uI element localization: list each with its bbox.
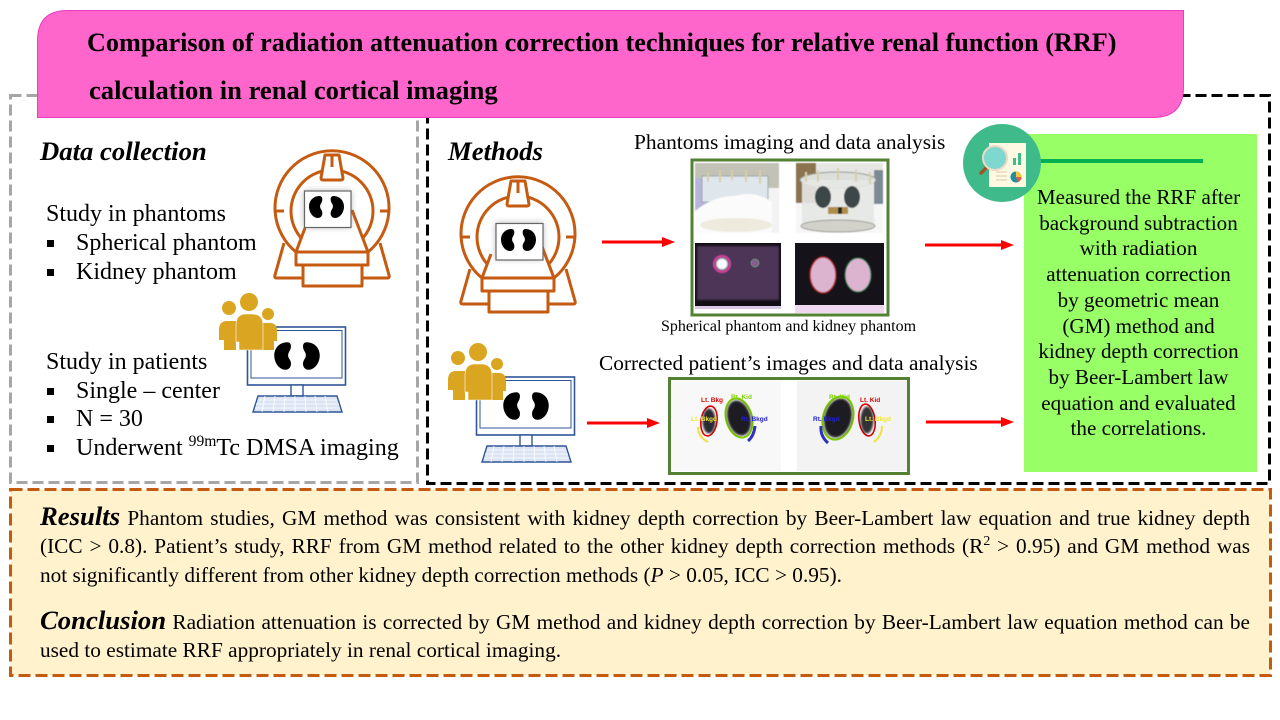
image: right patient scan: [813, 393, 891, 443]
panel: results and conclusion: [10, 490, 1270, 676]
text: conclusion: used to estimate RRF appropriately in renal cortical imaging.: [40, 638, 561, 662]
panel: data collection: [10, 96, 418, 482]
image: right patient scan: Lt. Kid: [860, 397, 880, 404]
text: outcome measure: by geometric mean: [1058, 288, 1219, 312]
image: left patient scan: Lt. Bkg: [701, 397, 723, 404]
figure: patient images: [670, 378, 908, 474]
text: outcome measure: Measured the RRF after: [1037, 185, 1240, 209]
image: left patient scan: [691, 394, 768, 442]
text: outcome measure: attenuation correction: [1046, 262, 1231, 286]
heading: methods: Methods: [448, 136, 543, 166]
list: patients: Single – center: [76, 378, 220, 404]
title text: Comparison of radiation attenuation correction techniques for relative renal function (RRF): [87, 28, 1116, 57]
text: results: (ICC > 0.8). Patient’s study, RRF from GM method related to the other kidney depth correction methods (R2 > 0.95) and GM method was: [40, 533, 1250, 558]
caption: phantom imaging: Phantoms imaging and data analysis: [634, 130, 945, 154]
text: results: Results Phantom studies, GM method was consistent with kidney depth correction by Beer-Lambert law equation and true kidney depth: [40, 501, 1250, 531]
caption: patient images: Corrected patient’s images and data analysis: [599, 351, 978, 375]
icon: patients and computer (methods): [448, 343, 574, 462]
text: results: [40, 501, 1250, 587]
image: left patient scan: Rt. Bkgd: [741, 416, 768, 423]
icon: scanner with kidneys (data collection): [275, 151, 389, 286]
arrow: phantom images to result: [925, 240, 1014, 250]
caption: phantom types: Spherical phantom and kidney phantom: [661, 318, 916, 335]
heading: data collection: Data collection: [40, 136, 207, 166]
list: phantoms: Spherical phantom: [76, 230, 257, 256]
text: outcome measure: background subtraction: [1039, 211, 1238, 235]
text: study in patients: Study in patients: [46, 349, 207, 375]
title banner: [38, 10, 1184, 118]
text: conclusion: [40, 605, 1250, 662]
text: outcome measure: (GM) method and: [1062, 314, 1215, 338]
text: results: not significantly different from other kidney depth correction methods (P > 0.05, ICC > 0.95).: [40, 563, 842, 587]
arrow: corrected images to result: [926, 417, 1014, 427]
image: right patient scan: Rt. Bkgd: [813, 416, 840, 423]
panel: methods: [428, 96, 1270, 484]
panel: outcome measure: [1024, 134, 1257, 472]
list: patients: Underwent 99mTc DMSA imaging: [76, 433, 399, 461]
image: kidney phantom scan: [795, 243, 884, 313]
icon: patients and computer (data collection): [219, 293, 346, 412]
image: spherical phantom scan: [695, 243, 781, 309]
icon: magnifier over report: [963, 124, 1041, 202]
title text second line: calculation in renal cortical imaging: [89, 75, 498, 105]
text: conclusion: Conclusion Radiation attenuation is corrected by GM method and kidney depth correction by Beer-Lambert law equation method can be: [40, 605, 1250, 635]
icon: scanner with kidneys (methods): [461, 177, 575, 312]
accent line: [1030, 159, 1203, 163]
figure: phantom images: [692, 160, 888, 315]
image: left patient scan: Rt. Kid: [731, 394, 752, 401]
text: study in phantoms: Study in phantoms: [46, 201, 226, 227]
list: phantoms: [47, 230, 257, 285]
text: outcome measure: [1037, 185, 1240, 440]
text: outcome measure: kidney depth correction: [1038, 339, 1239, 363]
text: outcome measure: by Beer-Lambert law: [1049, 365, 1228, 389]
image: right patient scan: Lt. Bkgd: [865, 416, 891, 423]
list: phantoms: Kidney phantom: [76, 259, 237, 285]
list: patients: N = 30: [76, 406, 143, 432]
text: outcome measure: equation and evaluated: [1041, 391, 1236, 415]
arrow: patients to corrected images: [587, 418, 660, 428]
photo: spherical phantom: [695, 163, 779, 233]
arrow: scanner to phantom images: [602, 237, 675, 247]
image: right patient scan: Rt. Kid: [829, 394, 850, 401]
text: outcome measure: with radiation: [1080, 236, 1197, 260]
photo: kidney phantom: [796, 163, 883, 233]
text: outcome measure: the correlations.: [1071, 416, 1206, 440]
list: patients: [47, 378, 399, 461]
image: left patient scan: Lt. Bkgd: [691, 416, 717, 423]
